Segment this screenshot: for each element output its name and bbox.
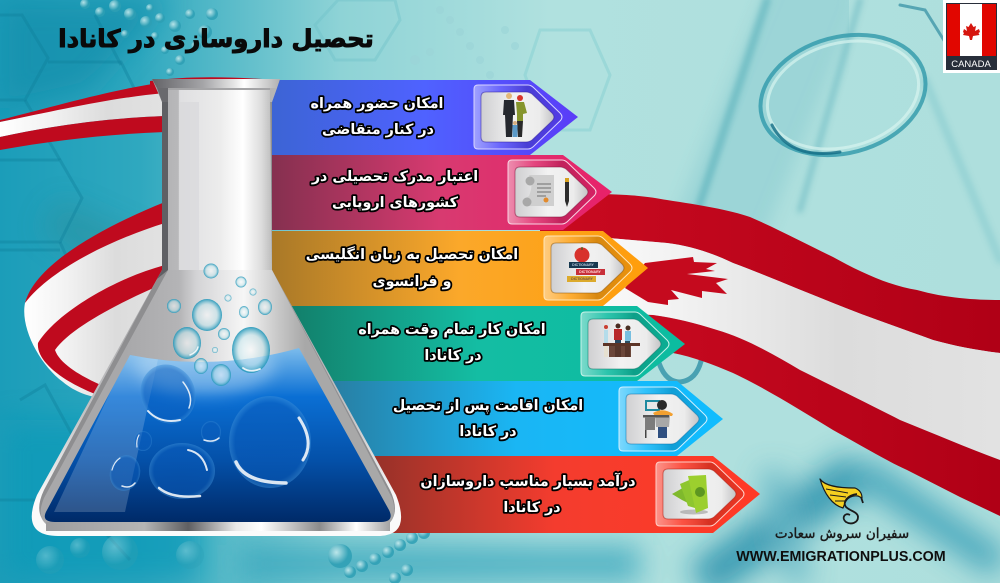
- icon plate: person at desk: [619, 387, 707, 451]
- bubbles in the liquid: [106, 355, 311, 499]
- text: banner 5: امکان اقامت پس از تحصیل: [393, 398, 583, 414]
- icon plate: money: [656, 462, 744, 526]
- test tubes: [655, 0, 1000, 382]
- flask glass body: [32, 79, 401, 536]
- banner 2: degree validity: کشورهای اروپایی: [332, 195, 459, 211]
- banner 6: high income: [350, 456, 760, 533]
- text: banner 6: درآمد بسیار مناسب داروسازان: [420, 472, 636, 490]
- text: banner 1: امکان حضور همراه: [311, 96, 443, 112]
- icon plate: dictionaries: DICTIONARY: [571, 277, 593, 281]
- text: banner 3: امکان تحصیل به زبان انگلیسی: [306, 246, 518, 263]
- banner 4: full-time work: در کانادا: [424, 348, 482, 364]
- banner 1: accompany applicant: در کنار متقاضی: [322, 122, 434, 138]
- banner 4: full-time work: [270, 306, 685, 381]
- icon plate: lab team: [581, 312, 669, 376]
- text: banner 4: امکان کار تمام وقت همراه: [358, 322, 546, 338]
- red and white ribbon, upper left: [0, 77, 275, 150]
- blue liquid: [45, 348, 391, 522]
- logo: [736, 479, 946, 565]
- icon plate: family: [474, 85, 562, 149]
- icon plate: dictionaries: DICTIONARY: [579, 270, 601, 274]
- icon plate: scroll and pen: [508, 160, 596, 224]
- flask lip: [152, 79, 280, 88]
- flask: [32, 79, 401, 536]
- maple leaf on ribbon: [625, 257, 728, 305]
- flag caption: CANADA: [951, 59, 991, 70]
- banner 2: degree validity: [270, 155, 612, 230]
- bubbles above the liquid: [167, 264, 272, 386]
- banner 5: residency after study: در کانادا: [459, 424, 517, 440]
- icon: winged emblem: [820, 479, 863, 523]
- text: banner 2: اعتبار مدرک تحصیلی در: [311, 169, 478, 185]
- banner 6: high income: در کانادا: [503, 500, 561, 516]
- banner 1: accompany applicant: [270, 80, 578, 155]
- company name: سفیران سروش سعادت: [775, 526, 909, 542]
- title: تحصیل داروسازی در کانادا: [58, 24, 374, 53]
- icon plate: dictionaries: DICTIONARY: [572, 263, 594, 267]
- flask bottom rim: [46, 522, 390, 531]
- red and white ribbon, lower left loop: [24, 202, 165, 397]
- molecules: [36, 0, 430, 583]
- website: WWW.EMIGRATIONPLUS.COM: [736, 549, 946, 565]
- red and white ribbon, right side with maple leaf: [540, 194, 1000, 516]
- hexagon pattern: [0, 0, 610, 560]
- banner 3: study in English and French: [270, 231, 648, 306]
- Canada flag badge: [943, 0, 1000, 73]
- icon: maple leaf: [963, 23, 980, 40]
- banner 3: study in English and French: و فرانسوی: [372, 274, 452, 290]
- bubble highlights: [112, 347, 308, 497]
- icon plate: dictionaries: [544, 236, 632, 300]
- banner 5: residency after study: [310, 381, 723, 456]
